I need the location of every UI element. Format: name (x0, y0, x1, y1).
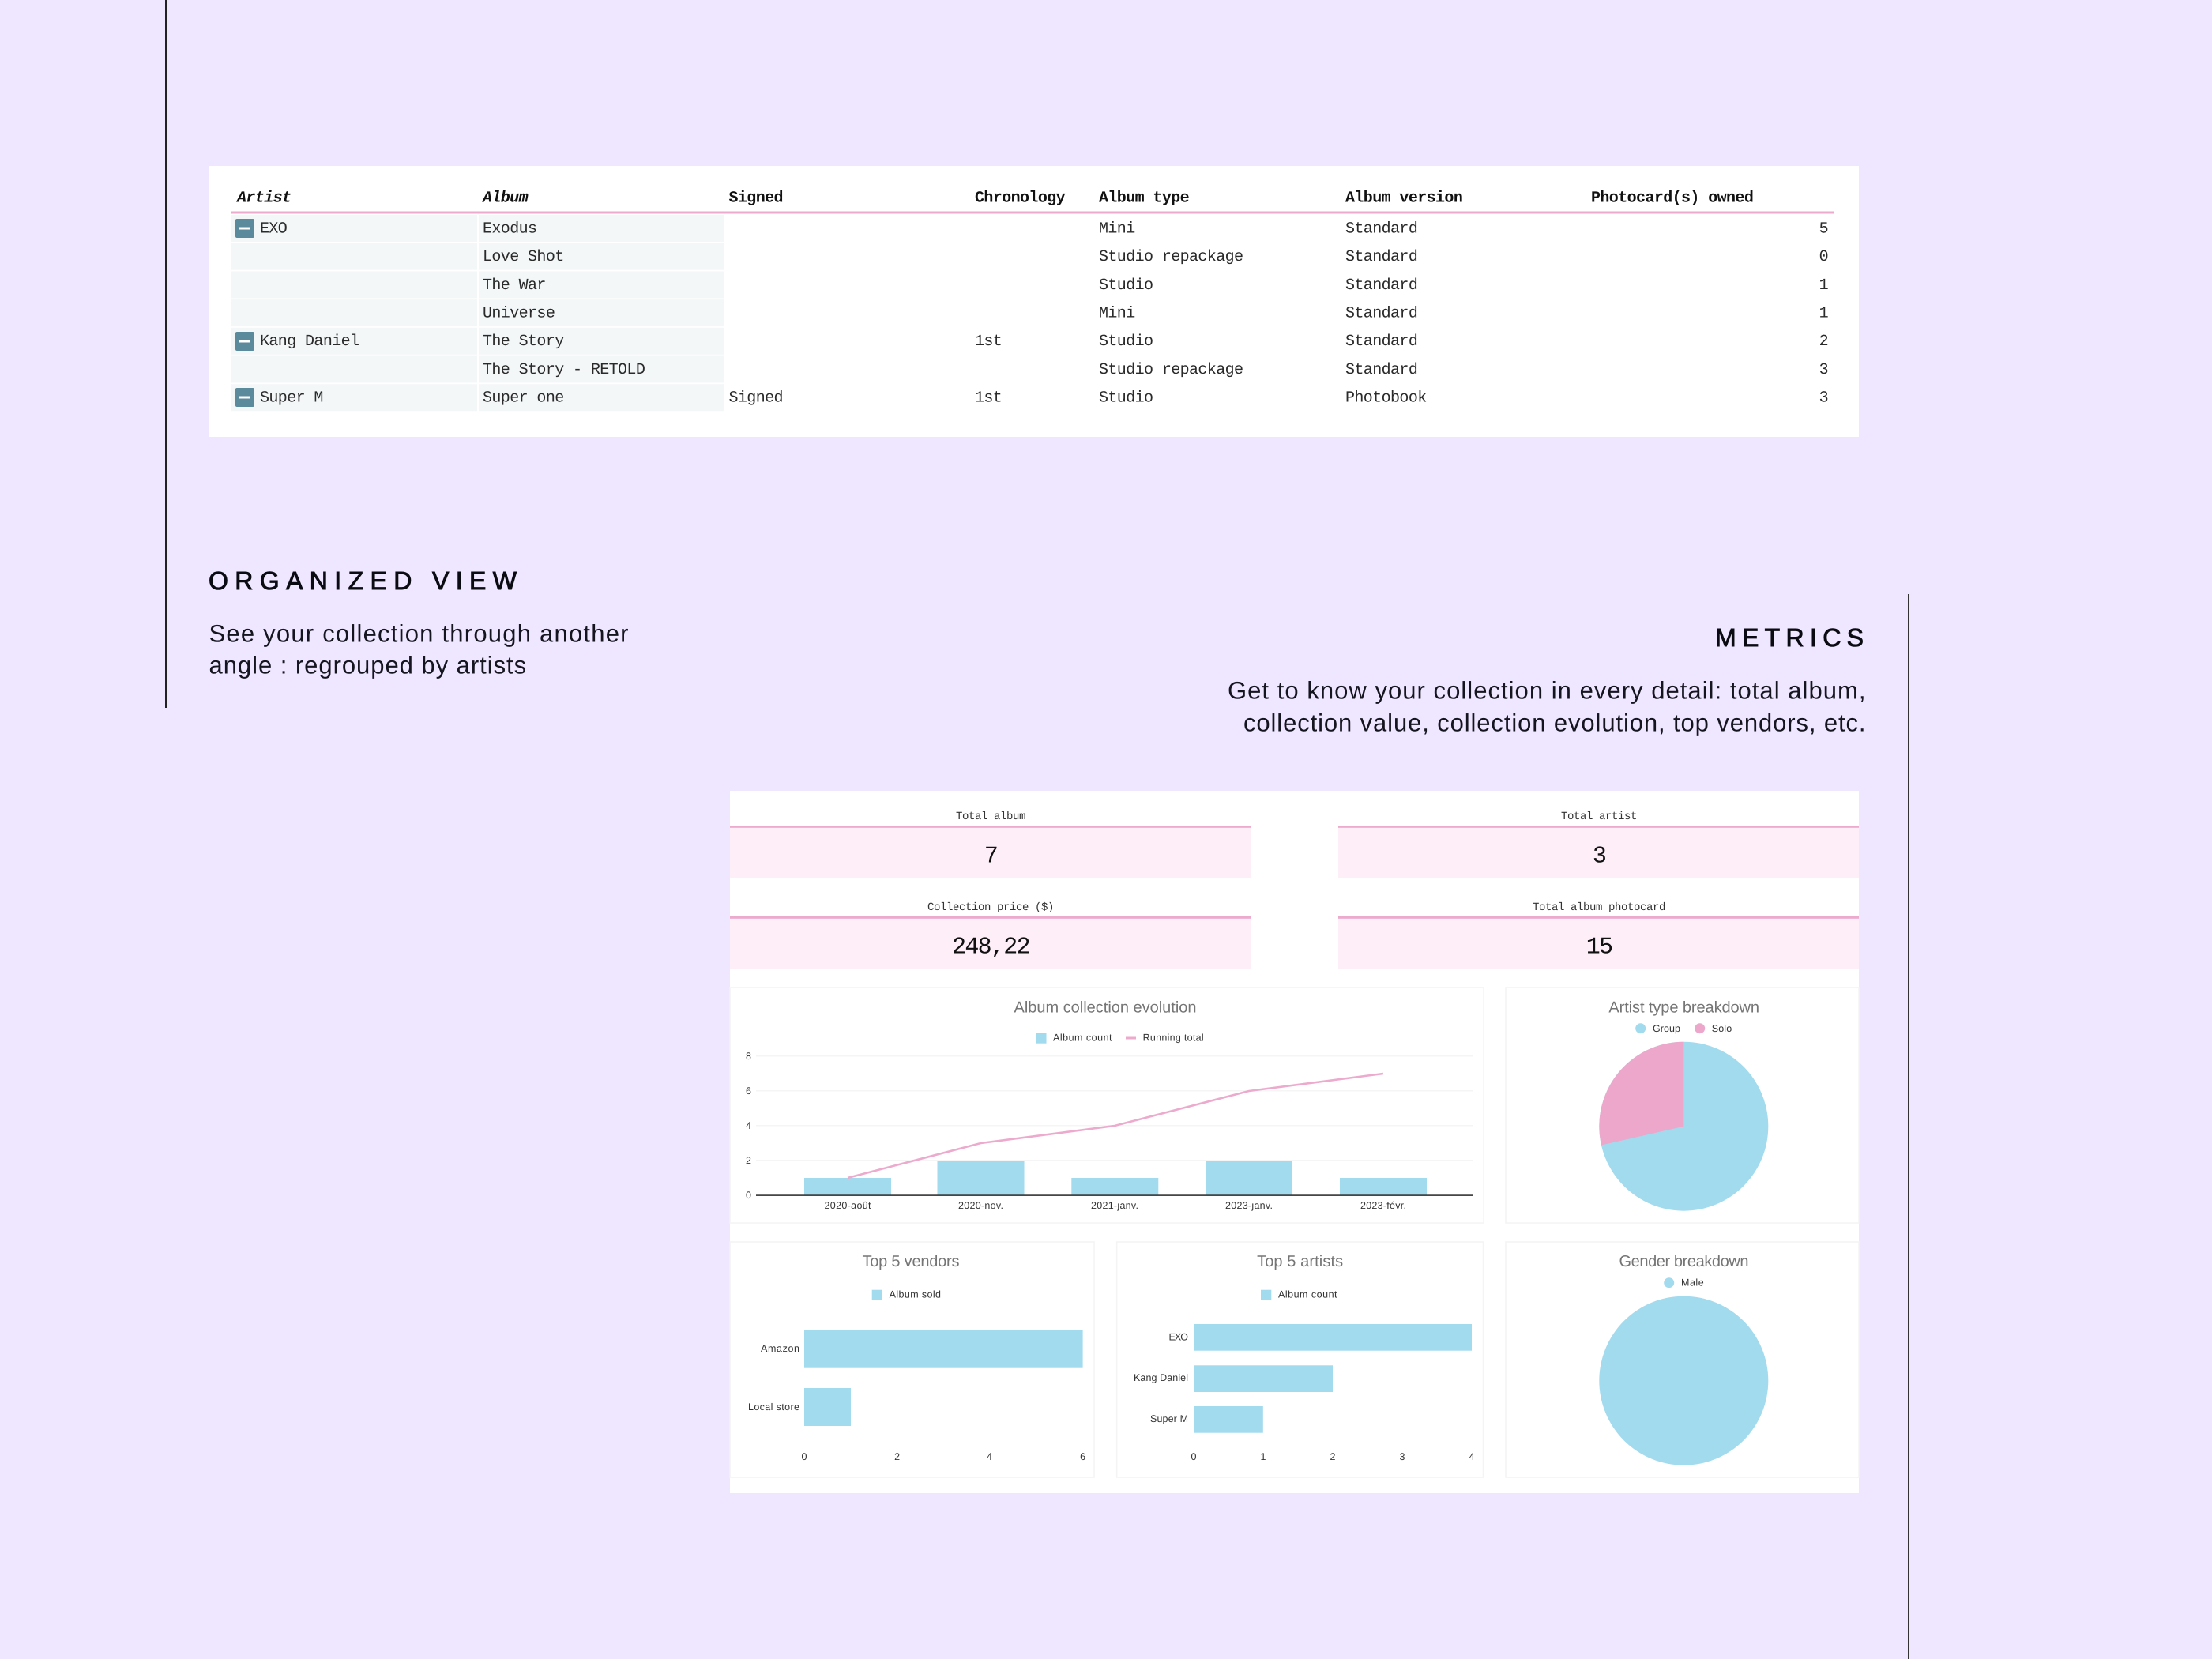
artist axis ticks: 3 (1400, 1451, 1405, 1462)
table artist and album column shading (231, 215, 724, 411)
row: EXO Exodus: Standard (1345, 220, 1417, 238)
row: The War (483, 276, 1829, 295)
chart: top 5 artists: Top 5 artists (1257, 1253, 1343, 1270)
legend: group and solo (1635, 1023, 1732, 1034)
line: running total (848, 1074, 1383, 1178)
row: Love Shot: Studio repackage (1099, 248, 1243, 266)
table header underline (231, 212, 1834, 213)
metric card: total album (730, 811, 1251, 878)
metric card: total artist (1338, 811, 1859, 878)
table header row: Album version (1345, 189, 1462, 207)
bars: album count (804, 1161, 1427, 1195)
chart: gender breakdown pie: Gender breakdown (1620, 1253, 1749, 1270)
text block: organized view description: angle : regrouped by artists (209, 652, 526, 679)
row: EXO Exodus (235, 219, 1828, 238)
text block: metrics description: collection value, collection evolution, top vendors, etc. (1243, 709, 1866, 736)
row: Kang Daniel The Story: Studio (1099, 333, 1153, 351)
row: The Story - RETOLD (483, 361, 1828, 379)
vendor axis ticks: 2 (894, 1451, 900, 1462)
bars: vendors (804, 1330, 1083, 1426)
left vertical rule (165, 0, 167, 708)
y axis labels: 8 (746, 1051, 751, 1062)
row: The War: Standard (1345, 276, 1417, 295)
row: Super M Super one: 3 (1819, 389, 1828, 408)
table header row: Album (481, 189, 529, 207)
row: Super M Super one: Super one (483, 389, 564, 408)
row: Universe: 1 (1819, 305, 1829, 323)
metric card: total album: Total album (956, 811, 1025, 823)
vendor axis ticks (802, 1451, 1085, 1462)
row: Kang Daniel The Story: Standard (1345, 333, 1417, 351)
y axis labels: 0 (746, 1190, 751, 1201)
row: Super M Super one: Super M (260, 389, 323, 408)
x axis labels: 2023-févr. (1360, 1200, 1406, 1211)
y axis labels: 2 (746, 1155, 751, 1166)
metric card: total album photocard (1338, 901, 1859, 969)
panel: metrics dashboard (730, 791, 1859, 1493)
heading: metrics: METRICS (1715, 623, 1864, 652)
vendor labels (748, 1343, 799, 1413)
x axis labels: 2021-janv. (1091, 1200, 1138, 1211)
row: The War: Studio (1099, 276, 1153, 295)
chart: top 5 vendors (730, 1242, 1094, 1477)
vendor axis ticks: 0 (802, 1451, 807, 1462)
chart: artist type breakdown pie: Artist type breakdown (1608, 999, 1759, 1017)
table header row: Album type (1099, 189, 1190, 207)
y axis labels (746, 1051, 751, 1201)
x axis labels: 2020-août (825, 1200, 871, 1211)
row: EXO Exodus: EXO (260, 220, 287, 238)
x axis labels (825, 1200, 1406, 1211)
legend: male (1664, 1277, 1704, 1288)
legend: group and solo: Group (1653, 1023, 1680, 1034)
artist axis ticks: 4 (1469, 1451, 1475, 1462)
artist labels: Kang Daniel (1134, 1372, 1188, 1383)
row: The War: The War (483, 276, 546, 295)
row: EXO Exodus: 5 (1819, 220, 1828, 238)
legend: album count and running total: Album count (1053, 1033, 1112, 1044)
artist labels: Super M (1150, 1413, 1188, 1424)
row: Super M Super one (235, 388, 1828, 408)
row: The Story - RETOLD: The Story - RETOLD (483, 361, 645, 379)
row: Love Shot (483, 248, 1828, 266)
artist axis ticks: 1 (1261, 1451, 1266, 1462)
row: EXO Exodus: Mini (1099, 220, 1135, 238)
chart: top 5 vendors: Top 5 vendors (863, 1253, 959, 1270)
artist axis ticks: 0 (1191, 1451, 1197, 1462)
y axis labels: 4 (746, 1120, 751, 1131)
table header row: Artist (235, 189, 291, 207)
bars: artists (1194, 1324, 1472, 1433)
pie (1599, 1296, 1768, 1465)
right vertical rule (1908, 594, 1909, 1659)
row: The Story - RETOLD: Studio repackage (1099, 361, 1243, 379)
text block: metrics description (1228, 676, 1866, 736)
vendor axis ticks: 4 (987, 1451, 992, 1462)
metric card: total album: 7 (984, 844, 997, 871)
metric card: total album photocard: Total album photocard (1533, 901, 1665, 914)
row: Love Shot: Love Shot (483, 248, 564, 266)
table header row: Photocard(s) owned (1591, 189, 1753, 207)
chart: gender breakdown pie (1506, 1242, 1859, 1477)
text block: organized view description: See your collection through another (209, 620, 629, 648)
row: Kang Daniel The Story: 2 (1819, 333, 1828, 351)
row: The Story - RETOLD: 3 (1819, 361, 1828, 379)
x axis labels: 2020-nov. (958, 1200, 1003, 1211)
metric card: collection price: 248,22 (952, 934, 1029, 961)
text block: organized view description (209, 620, 629, 679)
row: Universe (483, 305, 1829, 322)
legend: album count: Album count (1278, 1289, 1337, 1300)
axis baseline (756, 1194, 1473, 1196)
table header row: Chronology (975, 189, 1066, 207)
row: Love Shot: 0 (1819, 248, 1828, 266)
metric card: total artist: Total artist (1561, 811, 1637, 823)
row: Universe: Mini (1099, 305, 1135, 323)
row: Kang Daniel The Story (235, 332, 1828, 351)
row: Super M Super one: 1st (975, 389, 1002, 408)
row: Super M Super one: Signed (728, 389, 783, 408)
table header row (235, 189, 1753, 207)
artist labels: EXO (1169, 1332, 1188, 1343)
x axis labels: 2023-janv. (1225, 1200, 1273, 1211)
row: Universe: Universe (483, 305, 555, 323)
chart: artist type breakdown pie (1506, 988, 1859, 1223)
text block: metrics description: Get to know your collection in every detail: total album, (1228, 676, 1866, 705)
metric card: total artist: 3 (1593, 844, 1606, 871)
row: Kang Daniel The Story: Kang Daniel (260, 333, 359, 351)
metric card: total album photocard: 15 (1586, 934, 1612, 961)
row: Super M Super one: Photobook (1345, 389, 1427, 408)
chart: top 5 artists (1117, 1242, 1484, 1477)
row: The War: 1 (1819, 276, 1829, 295)
vendor axis ticks: 6 (1080, 1451, 1085, 1462)
legend: album count and running total: Running total (1143, 1033, 1204, 1044)
chart: album collection evolution: Album collection evolution (1014, 999, 1196, 1017)
table header row: Signed (728, 189, 783, 207)
pie slices (1599, 1042, 1768, 1211)
legend: album count and running total (1036, 1033, 1204, 1044)
metric card: collection price: Collection price ($) (927, 901, 1054, 914)
artist axis ticks (1191, 1451, 1475, 1462)
row: EXO Exodus: Exodus (483, 220, 536, 238)
panel: album table (209, 166, 1859, 437)
row: Universe: Standard (1345, 305, 1417, 323)
artist axis ticks: 2 (1330, 1451, 1336, 1462)
vendor labels: Amazon (761, 1343, 799, 1354)
legend: group and solo: Solo (1712, 1023, 1732, 1034)
chart: album collection evolution (730, 988, 1484, 1223)
y axis labels: 6 (746, 1085, 751, 1097)
row: Kang Daniel The Story: 1st (975, 333, 1002, 351)
artist labels (1134, 1332, 1188, 1424)
legend: album sold: Album sold (890, 1289, 941, 1300)
heading: organized view: ORGANIZED VIEW (209, 566, 517, 595)
row: Kang Daniel The Story: The Story (483, 333, 564, 351)
metric card: collection price (730, 901, 1251, 969)
row: The Story - RETOLD: Standard (1345, 361, 1417, 379)
row: Super M Super one: Studio (1099, 389, 1153, 408)
legend: male: Male (1681, 1277, 1704, 1288)
row: Love Shot: Standard (1345, 248, 1417, 266)
vendor labels: Local store (748, 1401, 799, 1413)
